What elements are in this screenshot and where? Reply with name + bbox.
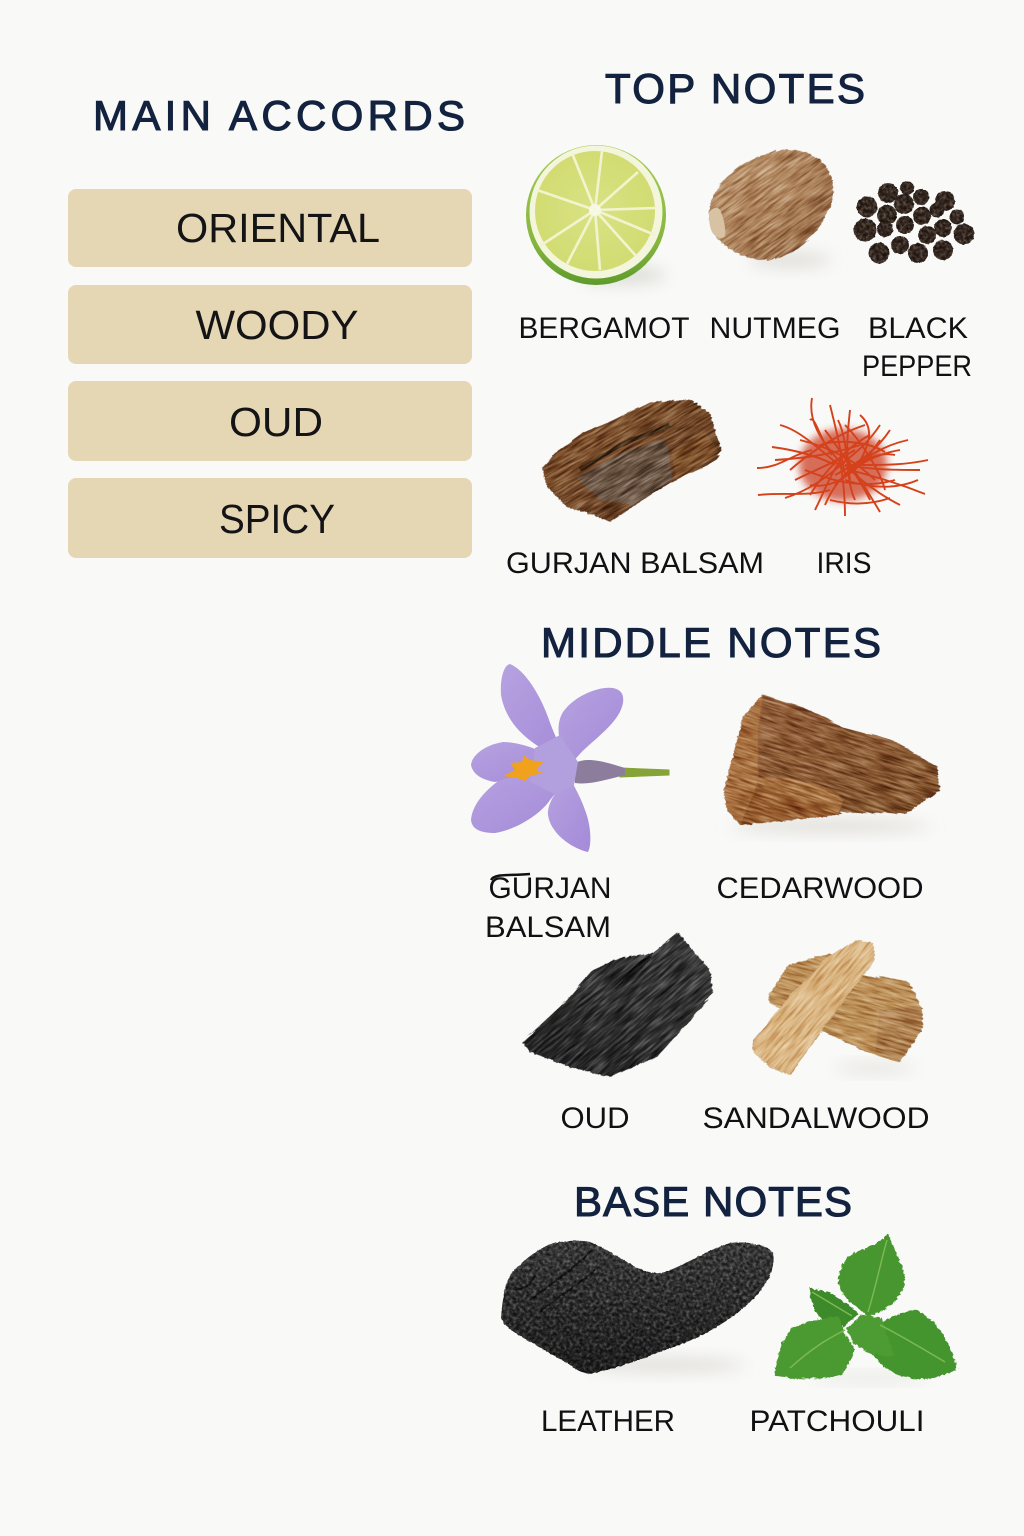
heading: top notes: TOP NOTES bbox=[605, 65, 865, 112]
label: patchouli: PATCHOULI bbox=[750, 1405, 924, 1438]
label: bergamot: BERGAMOT bbox=[518, 312, 690, 345]
accord: spicy bbox=[68, 478, 472, 558]
label: oud: OUD bbox=[560, 1102, 630, 1135]
icon: nutmeg bbox=[657, 91, 885, 318]
label: leather: LEATHER bbox=[541, 1405, 675, 1438]
icon: purple flower bbox=[471, 664, 669, 852]
icon: cedarwood bbox=[686, 631, 978, 888]
icon: iris threads bbox=[757, 398, 928, 516]
label: gurjan balsam: BALSAM bbox=[485, 911, 611, 944]
accord: oriental: ORIENTAL bbox=[176, 205, 380, 251]
accord: oriental bbox=[68, 189, 472, 267]
label: black pepper: PEPPER bbox=[862, 350, 972, 383]
label: gurjan balsam: GURJAN bbox=[488, 872, 612, 905]
accord: oud: OUD bbox=[229, 399, 323, 445]
icon: oud bbox=[451, 839, 784, 1171]
icon: leather bbox=[501, 1241, 774, 1374]
label: cedarwood: CEDARWOOD bbox=[716, 872, 924, 905]
icon: black pepper bbox=[854, 181, 974, 264]
heading: main accords: MAIN ACCORDS bbox=[93, 92, 465, 139]
accord: spicy: SPICY bbox=[219, 496, 335, 542]
icon: gurjan balsam resin bbox=[489, 322, 774, 600]
accord: woody: WOODY bbox=[196, 302, 358, 348]
label: sandalwood: SANDALWOOD bbox=[702, 1102, 930, 1135]
heading: middle notes: MIDDLE NOTES bbox=[541, 619, 881, 666]
label: iris: IRIS bbox=[816, 547, 872, 580]
label: nutmeg: NUTMEG bbox=[710, 312, 840, 345]
panel: main accords list bbox=[68, 189, 472, 558]
label: gurjan balsam: GURJAN BALSAM bbox=[506, 547, 764, 580]
label: gurjan balsam bbox=[485, 872, 612, 944]
icon: patchouli bbox=[773, 1233, 957, 1382]
icon: sandalwood bbox=[685, 879, 950, 1136]
accord: oud bbox=[68, 381, 472, 461]
heading: base notes: BASE NOTES bbox=[574, 1178, 852, 1225]
accord: woody bbox=[68, 285, 472, 364]
label: black pepper bbox=[862, 312, 972, 383]
label: black pepper: BLACK bbox=[868, 312, 968, 345]
icon: bergamot bbox=[526, 145, 666, 285]
